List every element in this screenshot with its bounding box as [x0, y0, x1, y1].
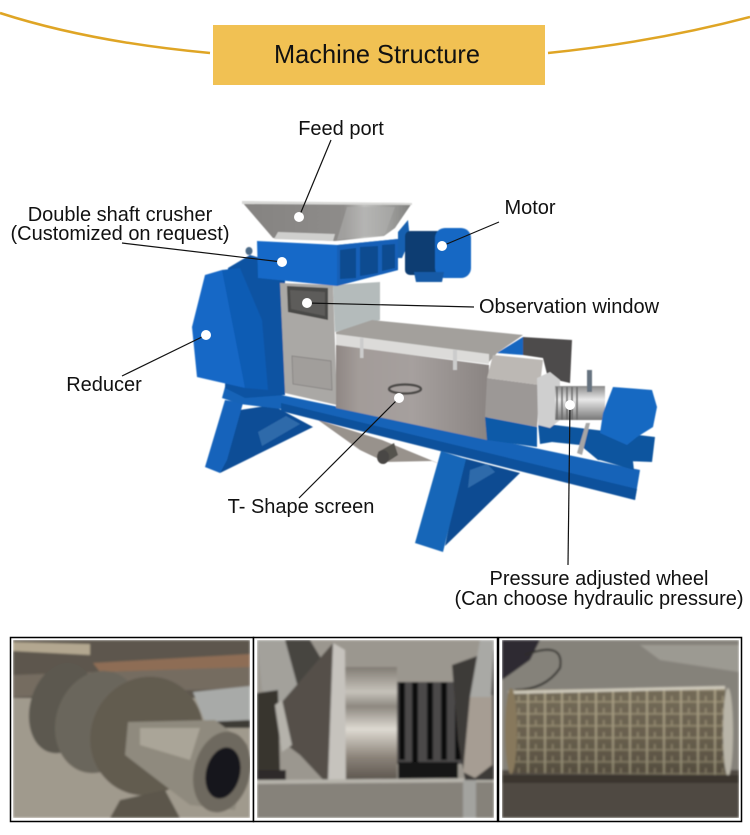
stainless screen housing — [336, 320, 572, 447]
leader line and dot: screen — [299, 393, 404, 498]
photo panel: pressure cone and spring — [254, 638, 498, 822]
rear rail under press — [538, 423, 655, 462]
label: observation window: Observation window — [479, 296, 660, 318]
crusher box — [257, 239, 398, 286]
label: reducer: Reducer — [66, 374, 142, 396]
leader line and dot: wheel — [565, 400, 575, 565]
label: feed port: Feed port — [298, 118, 384, 140]
lower collection hopper — [318, 420, 445, 466]
label: crusher: Double shaft crusher — [28, 204, 213, 226]
leader line and dot: reducer — [122, 330, 211, 376]
hopper — [242, 201, 412, 241]
decorative curve: left — [0, 13, 210, 53]
title banner — [213, 25, 545, 85]
label: screen: T- Shape screen — [228, 496, 374, 518]
decorative curve: right — [548, 17, 750, 53]
photo panel: screw shaft — [10, 638, 259, 822]
main sloped beam — [222, 387, 640, 500]
leader line and dot: feed port — [294, 140, 331, 222]
left leg — [205, 400, 313, 473]
label: wheel: (Can choose hydraulic pressure) — [454, 588, 744, 610]
leader line and dot: observation window — [302, 298, 474, 308]
right leg — [415, 451, 520, 552]
label: motor: Motor — [504, 197, 556, 219]
machine illustration — [192, 201, 657, 552]
motor — [398, 220, 471, 282]
drain pipe — [377, 443, 398, 464]
leader line and dot: motor — [437, 222, 499, 251]
photo panel: T-shape screen cylinder — [498, 638, 742, 822]
square steel column — [280, 282, 380, 405]
pressure wheel gear unit — [600, 387, 657, 470]
leader line and dot: crusher — [122, 243, 287, 267]
label: crusher: (Customized on request) — [11, 223, 229, 245]
label: wheel: Pressure adjusted wheel — [489, 568, 709, 590]
title banner: Machine Structure — [274, 39, 480, 69]
screw press shaft — [537, 370, 605, 455]
reducer gearbox — [192, 247, 285, 398]
